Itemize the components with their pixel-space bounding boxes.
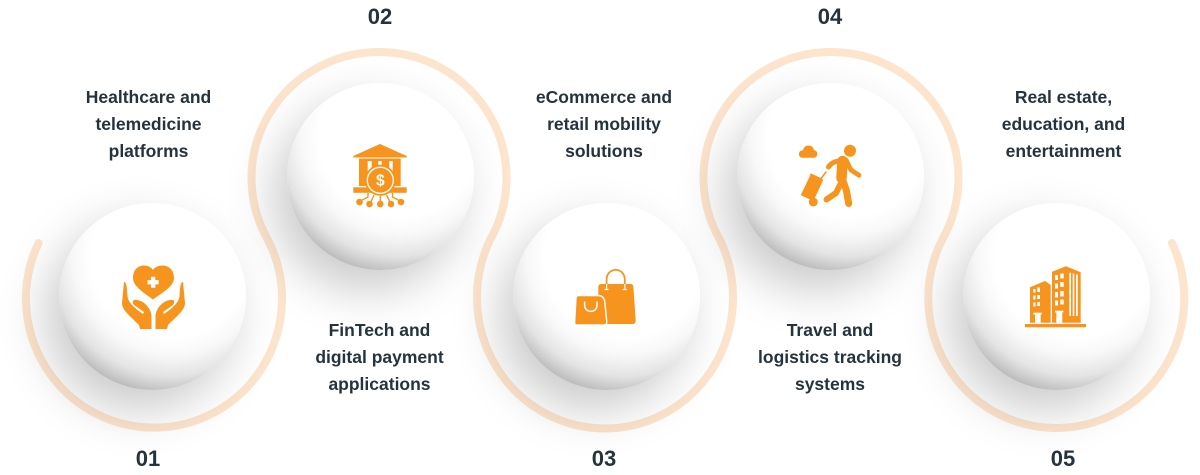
sphere 1: [59, 203, 246, 390]
number 05: 05: [1051, 446, 1075, 471]
number 01: 01: [136, 446, 160, 471]
text: step 4: Travel and: [787, 320, 873, 340]
text: step 2: digital payment: [315, 346, 444, 366]
text: step 3: eCommerce and: [536, 86, 672, 106]
text: step 5: education, and: [1002, 114, 1125, 134]
icon: shopping bags: [575, 270, 636, 325]
sphere 2: [287, 83, 474, 270]
number 03: 03: [592, 446, 616, 471]
text: step 1: telemedicine: [95, 114, 202, 134]
icon: hands holding heart: [122, 265, 185, 329]
text: step 5: entertainment: [1006, 140, 1121, 160]
text: step 5: [1002, 86, 1125, 160]
icon: traveler with suitcase: [799, 145, 859, 206]
text: step 3: [536, 86, 672, 160]
text: step 1: Healthcare and: [86, 86, 211, 106]
text: step 3: solutions: [565, 140, 643, 160]
number 04: 04: [818, 4, 842, 29]
text: step 1: [86, 86, 211, 160]
text: step 1: platforms: [109, 140, 188, 160]
text: step 2: FinTech and: [329, 320, 430, 340]
sphere 3: [513, 203, 700, 390]
icon: bank with dollar coin: [353, 144, 407, 207]
icon: bank with dollar coin: $: [376, 173, 385, 190]
text: step 5: Real estate,: [1015, 86, 1112, 106]
number 02: 02: [368, 4, 392, 29]
text: step 3: retail mobility: [547, 114, 661, 134]
text: step 2: applications: [328, 374, 431, 394]
text: step 4: [758, 320, 902, 394]
icon: office buildings: [1025, 266, 1086, 327]
text: step 2: [315, 320, 444, 394]
text: step 4: logistics tracking: [758, 346, 902, 366]
sphere 4: [737, 83, 924, 270]
sphere 5: [963, 203, 1150, 390]
text: step 4: systems: [795, 374, 865, 394]
